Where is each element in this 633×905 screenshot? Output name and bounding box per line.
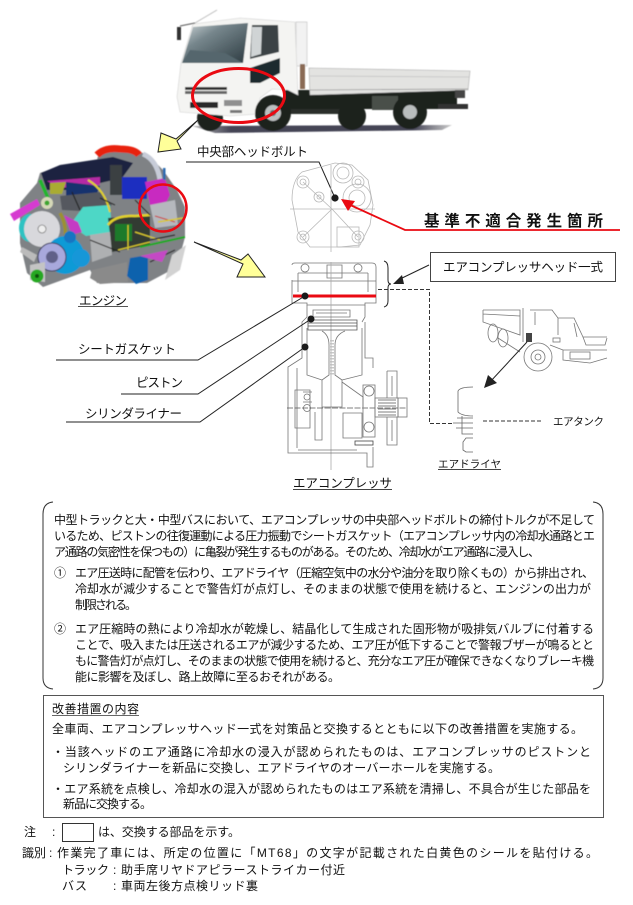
note: replaced parts <box>24 824 240 842</box>
label: air compressor: エアコンプレッサ <box>293 476 392 490</box>
identification notes: : <box>113 879 116 893</box>
label: seat gasket <box>56 292 308 360</box>
panel: defect description <box>43 502 603 689</box>
measures text: シリンダライナーを新品に交換し、エアドライヤのオーバーホールを実施する。 <box>63 760 500 775</box>
item 1: 冷却水が減少することで警告灯が点灯し、そのままの状態で使用を続けると、エンジンの出力が <box>75 581 591 596</box>
red gasket bar <box>293 294 376 298</box>
bolt position dot <box>331 194 339 202</box>
rounded corner brackets <box>43 502 603 689</box>
intro text: ア通路の気密性を保つもの）に亀裂が発生するものがある。そのため、冷却水がエア通路に浸入し、 <box>54 544 540 559</box>
red ellipse marker <box>192 68 284 122</box>
label: cylinder liner <box>66 344 308 422</box>
label: air tank: エアタンク <box>553 416 604 428</box>
label box: compressor head assembly <box>430 252 616 282</box>
measures text: 新品に交換する。 <box>63 797 152 811</box>
identification notes: バス <box>62 879 87 893</box>
compressor top view <box>290 163 375 252</box>
item 2: エア圧縮時の熱により冷却水が乾燥し、結晶化して生成された固形物が吸排気バルブに付着する <box>75 621 594 636</box>
identification notes: : <box>49 846 52 860</box>
note: replaced parts: 注 <box>24 825 36 839</box>
identification notes: 作業完了車には、所定の位置に「MT68」の文字が記載された白黄色のシールを貼付ける。 <box>57 845 598 860</box>
brace: head assembly <box>384 261 391 307</box>
identification notes <box>22 845 598 893</box>
identification notes: 車両左後方点検リッド裏 <box>121 878 258 893</box>
label box: compressor head assembly: エアコンプレッサヘッド一式 <box>443 260 603 274</box>
label: engine: エンジン <box>79 294 127 308</box>
drier on truck <box>526 333 532 342</box>
arrow: head assembly <box>393 265 429 284</box>
identification notes: : <box>113 863 116 877</box>
arrow: truck to engine <box>158 120 198 152</box>
dashed air line <box>378 290 453 424</box>
label: center head bolt <box>186 144 335 198</box>
intro text <box>54 512 595 559</box>
item 2: 能に影響を及ぼし、路上故障に至るおそれがある。 <box>75 669 340 684</box>
identification notes: 助手席リヤドアピラーストライカー付近 <box>121 863 345 877</box>
panel: improvement measures <box>44 696 604 818</box>
label: cylinder liner: シリンダライナー <box>85 406 182 421</box>
item 1 <box>54 565 594 612</box>
item 1: 制限される。 <box>75 598 137 612</box>
truck rear-side sketch <box>483 308 607 371</box>
label: nonconformity location: 基準不適合発生箇所 <box>424 211 603 230</box>
label: air dryer: エアドライヤ <box>438 458 501 470</box>
red arrow: nonconformity location <box>341 199 620 230</box>
air dryer sketch <box>453 387 473 452</box>
measures text: ・エア系統を点検し、冷却水の混入が認められたものはエア系統を清掃し、不具合が生じた部品を <box>52 781 591 796</box>
item 1: ① <box>54 566 66 580</box>
measures text <box>52 721 591 811</box>
truck photo <box>177 10 470 133</box>
heading: 改善措置の内容 <box>52 701 139 716</box>
item 2: ことで、吸入または圧送されるエアが減少するため、エア圧が低下することで警報ブザーが鳴るとと <box>75 637 594 652</box>
item 1: エア圧送時に配管を伝わり、エアドライヤ（圧縮空気中の水分や油分を取り除くもの）から排出され、 <box>75 565 594 580</box>
identification notes: 識別 <box>22 846 46 860</box>
label: piston: ピストン <box>136 376 183 390</box>
measures text: 全車両、エアコンプレッサヘッド一式を対策品と交換するとともに以下の改善措置を実施する。 <box>52 721 583 736</box>
compressor cross section <box>287 262 407 470</box>
item 2: もに警告灯が点灯し、そのままの状態で使用を続けると、充分なエア圧が確保できなくなりブレーキ機 <box>75 653 594 668</box>
red circle marker <box>140 184 186 232</box>
label: center head bolt: 中央部ヘッドボルト <box>197 144 308 159</box>
label: seat gasket: シートガスケット <box>78 342 176 356</box>
item 2: ② <box>54 622 66 636</box>
arrow: to air dryer <box>484 342 527 388</box>
engine illustration <box>10 148 186 287</box>
note: replaced parts: は、交換する部品を示す。 <box>98 825 240 839</box>
identification notes: トラック <box>62 863 109 877</box>
item 2 <box>54 621 594 684</box>
note: replaced parts: : <box>52 825 55 839</box>
intro text: いるため、ピストンの往復運動による圧力振動でシートガスケット（エアコンプレッサ内の冷却水通路とエ <box>54 528 595 543</box>
intro text: 中型トラックと大・中型バスにおいて、エアコンプレッサの中央部ヘッドボルトの締付トルクが不足して <box>54 512 595 527</box>
dashed line to air tank <box>483 420 542 422</box>
measures text: ・当該ヘッドのエア通路に冷却水の浸入が認められたものは、エアコンプレッサのピストンと <box>52 744 591 759</box>
arrow: engine to compressor <box>194 242 265 277</box>
label: piston <box>121 316 314 394</box>
